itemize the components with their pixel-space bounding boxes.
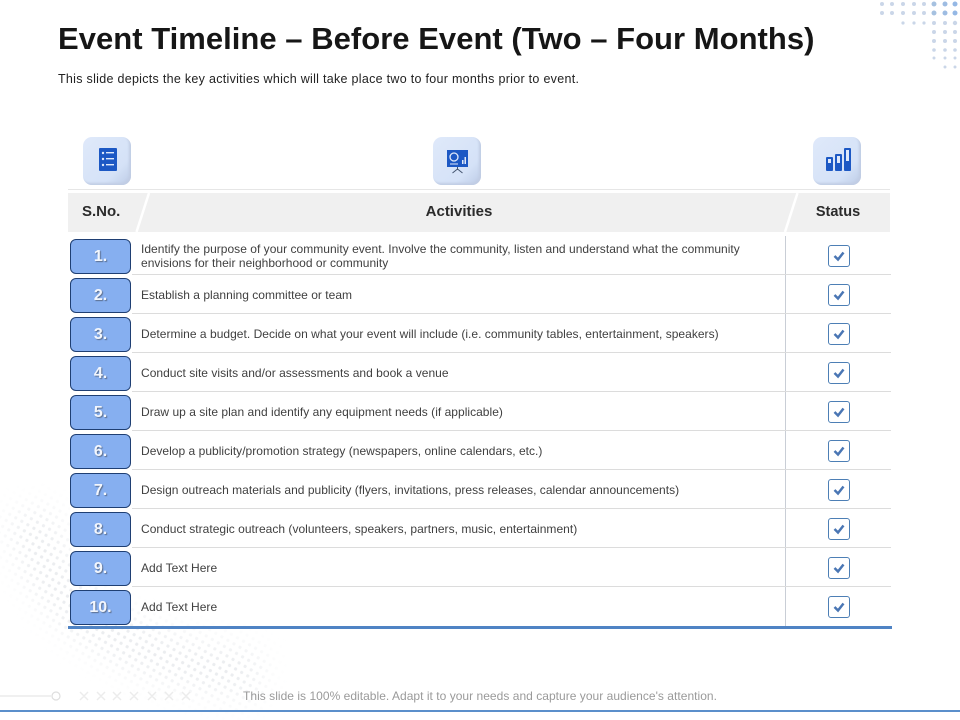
row 3 text: Determine a budget. Decide on what your event will include (i.e. community tables, entertainment, speakers) [141, 327, 719, 341]
row 5 number [70, 395, 131, 430]
row 9 check [828, 557, 850, 579]
row 10 check [828, 596, 850, 618]
row 4 number: 4. [94, 365, 107, 382]
row 8 number: 8. [94, 521, 107, 538]
row 1 check [828, 245, 850, 267]
header: Activities: Activities [426, 203, 492, 220]
decorative halftone swirl: bottom left [8, 506, 263, 700]
row 1 text [141, 242, 740, 270]
row 4 check [828, 362, 850, 384]
row 8 number [70, 512, 131, 547]
row 10 text: Add Text Here [141, 600, 217, 614]
row 6 number: 6. [94, 443, 107, 460]
header: S.No.: S.No. [82, 203, 120, 220]
row 3 number: 3. [94, 326, 107, 343]
row 7 check [828, 479, 850, 501]
icon: bar chart [813, 137, 861, 185]
header: Status: Status [816, 204, 860, 220]
footer rule [0, 710, 960, 712]
decorative dot pattern: top right [880, 2, 958, 68]
row 1 number [70, 239, 131, 274]
row 7 text: Design outreach materials and publicity (flyers, invitations, press releases, calendar announcements) [141, 483, 679, 497]
row 7 number [70, 473, 131, 508]
row 2 text: Establish a planning committee or team [141, 288, 352, 302]
footer note: This slide is 100% editable. Adapt it to your needs and capture your audience's attention. [243, 689, 717, 703]
row 7 number: 7. [94, 482, 107, 499]
row 2 check [828, 284, 850, 306]
row 6 check [828, 440, 850, 462]
subtitle: This slide depicts the key activities which will take place two to four months prior to event. [58, 72, 579, 86]
row 4 number [70, 356, 131, 391]
icon: list [83, 137, 131, 185]
row 3 check [828, 323, 850, 345]
table header row [68, 193, 890, 232]
row 2 number [70, 278, 131, 313]
row 6 number [70, 434, 131, 469]
row 9 number [70, 551, 131, 586]
row 3 number [70, 317, 131, 352]
row 2 number: 2. [94, 287, 107, 304]
row 10 number [70, 590, 131, 625]
row 9 text: Add Text Here [141, 561, 217, 575]
row 10 number: 10. [89, 599, 112, 616]
row 8 text: Conduct strategic outreach (volunteers, speakers, partners, music, entertainment) [141, 522, 577, 536]
icon: presentation board [433, 137, 481, 185]
row 1 text: envisions for their neighborhood or community [141, 256, 388, 270]
footer decoration: line, circle and crosses [0, 692, 190, 700]
row 1 text: Identify the purpose of your community event. Involve the community, listen and understand what the community [141, 242, 740, 256]
row 9 number: 9. [94, 560, 107, 577]
row 5 check [828, 401, 850, 423]
title: Event Timeline – Before Event (Two – Four Months) [58, 21, 814, 56]
row 5 number: 5. [94, 404, 107, 421]
row 8 check [828, 518, 850, 540]
row 4 text: Conduct site visits and/or assessments and book a venue [141, 366, 449, 380]
row 1 number: 1. [94, 248, 107, 265]
row 5 text: Draw up a site plan and identify any equipment needs (if applicable) [141, 405, 503, 419]
row 6 text: Develop a publicity/promotion strategy (newspapers, online calendars, etc.) [141, 444, 542, 458]
